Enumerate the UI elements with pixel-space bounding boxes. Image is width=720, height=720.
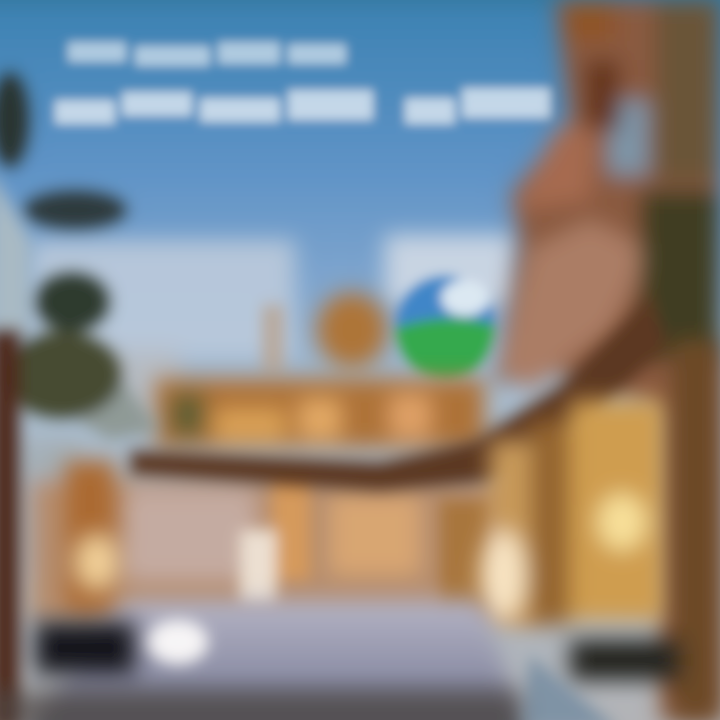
courtyard ground [20, 600, 530, 720]
right glowing room [481, 400, 665, 625]
clouds [30, 235, 515, 420]
tower [262, 305, 284, 370]
lower building facade [20, 440, 540, 620]
bottom floor edge [0, 690, 520, 720]
right wall and upper arch [495, 0, 720, 720]
dark planter right [570, 640, 680, 680]
dome [316, 292, 388, 368]
left palm foliage [0, 72, 160, 440]
horizontal wooden beam [130, 295, 668, 492]
dark planter left [35, 622, 135, 674]
white fountain glow [148, 620, 208, 664]
left pillar [0, 330, 20, 720]
title line one [68, 42, 346, 66]
central building [155, 378, 485, 448]
left lit column [65, 460, 117, 610]
right pillar [672, 340, 720, 720]
title line two [55, 88, 550, 124]
globe logo icon [395, 276, 495, 378]
central lit columns [240, 470, 490, 610]
bottom right path [520, 655, 620, 720]
title block [55, 42, 550, 124]
